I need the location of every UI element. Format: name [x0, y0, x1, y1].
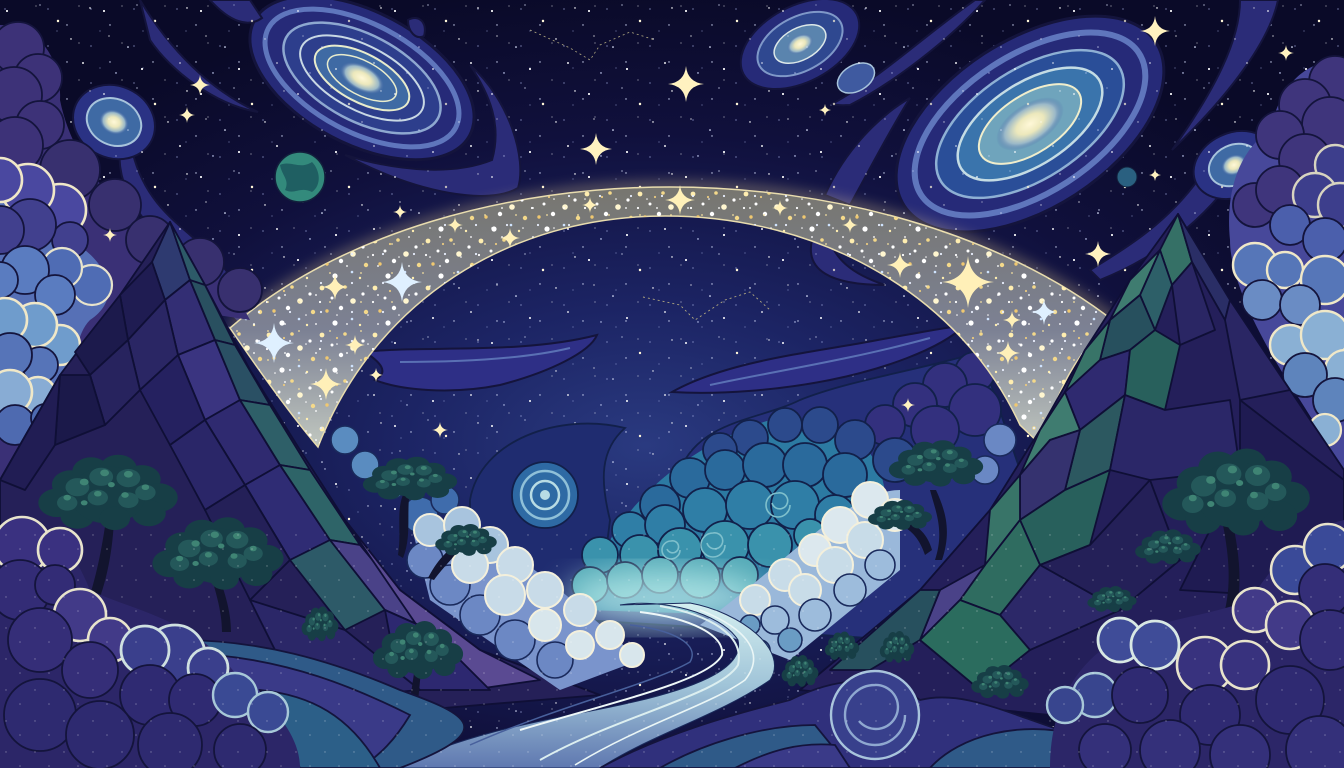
nebula wisp: right under arch [672, 325, 965, 393]
cloud texture [0, 520, 1344, 768]
tree: right valley [868, 440, 983, 560]
galaxy: small right [1182, 118, 1286, 212]
planet: small teal [1117, 167, 1137, 187]
clouds: right wall [1229, 56, 1344, 470]
valley glow [565, 570, 765, 626]
tree: left second [152, 517, 284, 632]
arch stars [310, 185, 1021, 400]
tree: far left [38, 455, 178, 612]
star dust over galaxies [0, 0, 1344, 300]
galaxy: large upper right spiral [858, 0, 1202, 276]
starry arch [230, 185, 1115, 448]
trees: small right slope [782, 586, 1137, 699]
river [395, 603, 775, 768]
cloud swirl: bottom centre [831, 671, 919, 759]
nebula wisp: left under arch [365, 335, 597, 390]
tree: far right [1135, 448, 1310, 612]
clouds: left wall [0, 22, 262, 480]
constellation: under arch [643, 292, 770, 320]
tree: lower left slope [373, 621, 463, 702]
tree: left valley [363, 457, 497, 580]
galaxy arm: upper right swirl [811, 0, 1278, 285]
constellation: top [530, 30, 655, 60]
large sky stars [103, 16, 1294, 438]
clouds: central valley right [700, 424, 1016, 660]
planet: green [275, 152, 325, 202]
satellite galaxy top right [832, 57, 880, 99]
galaxy: large upper left spiral [223, 0, 501, 194]
galaxy: small top centre [726, 0, 874, 108]
mountain: right [800, 214, 1344, 720]
tree: small left slope [302, 606, 338, 641]
distant clouds behind valley [470, 352, 1020, 640]
galaxy: small upper left [15, 72, 374, 368]
cloud swirls in distant clouds [662, 493, 790, 559]
galaxy arm: upper left swirl [140, 0, 520, 196]
foreground waves: bottom centre [180, 640, 1100, 768]
mountain: left [0, 222, 600, 720]
clouds: foreground left [0, 517, 300, 768]
clouds: central valley left [331, 426, 644, 690]
clouds: foreground right [1047, 520, 1344, 768]
arch glow [232, 187, 1115, 328]
